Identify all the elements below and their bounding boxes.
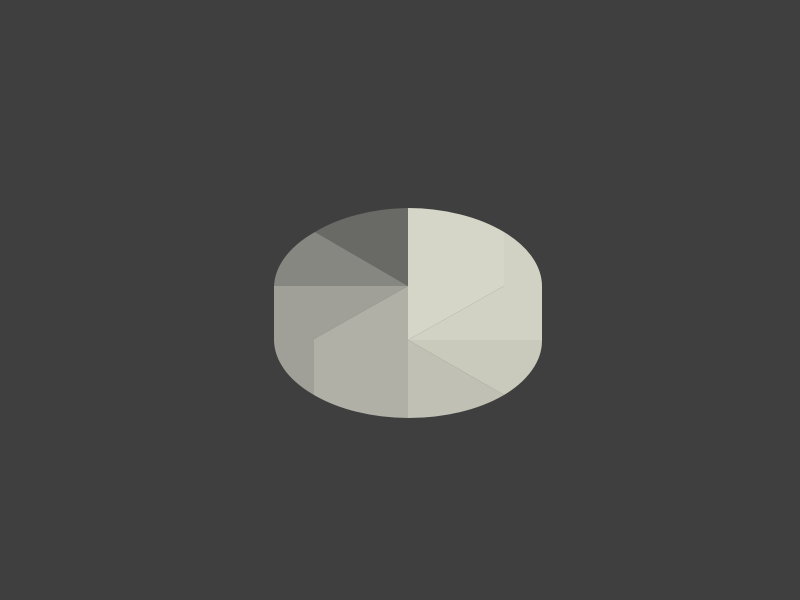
slice: right lower [408,340,542,395]
slice: bottom [408,340,504,418]
slice: dark top-left [315,208,408,286]
slice: right side [408,232,542,340]
slice: grey left side [274,286,408,395]
slice: bottom-left [314,286,408,418]
slice: lightest top-right [408,208,504,340]
slice: mid-grey left [274,232,408,286]
